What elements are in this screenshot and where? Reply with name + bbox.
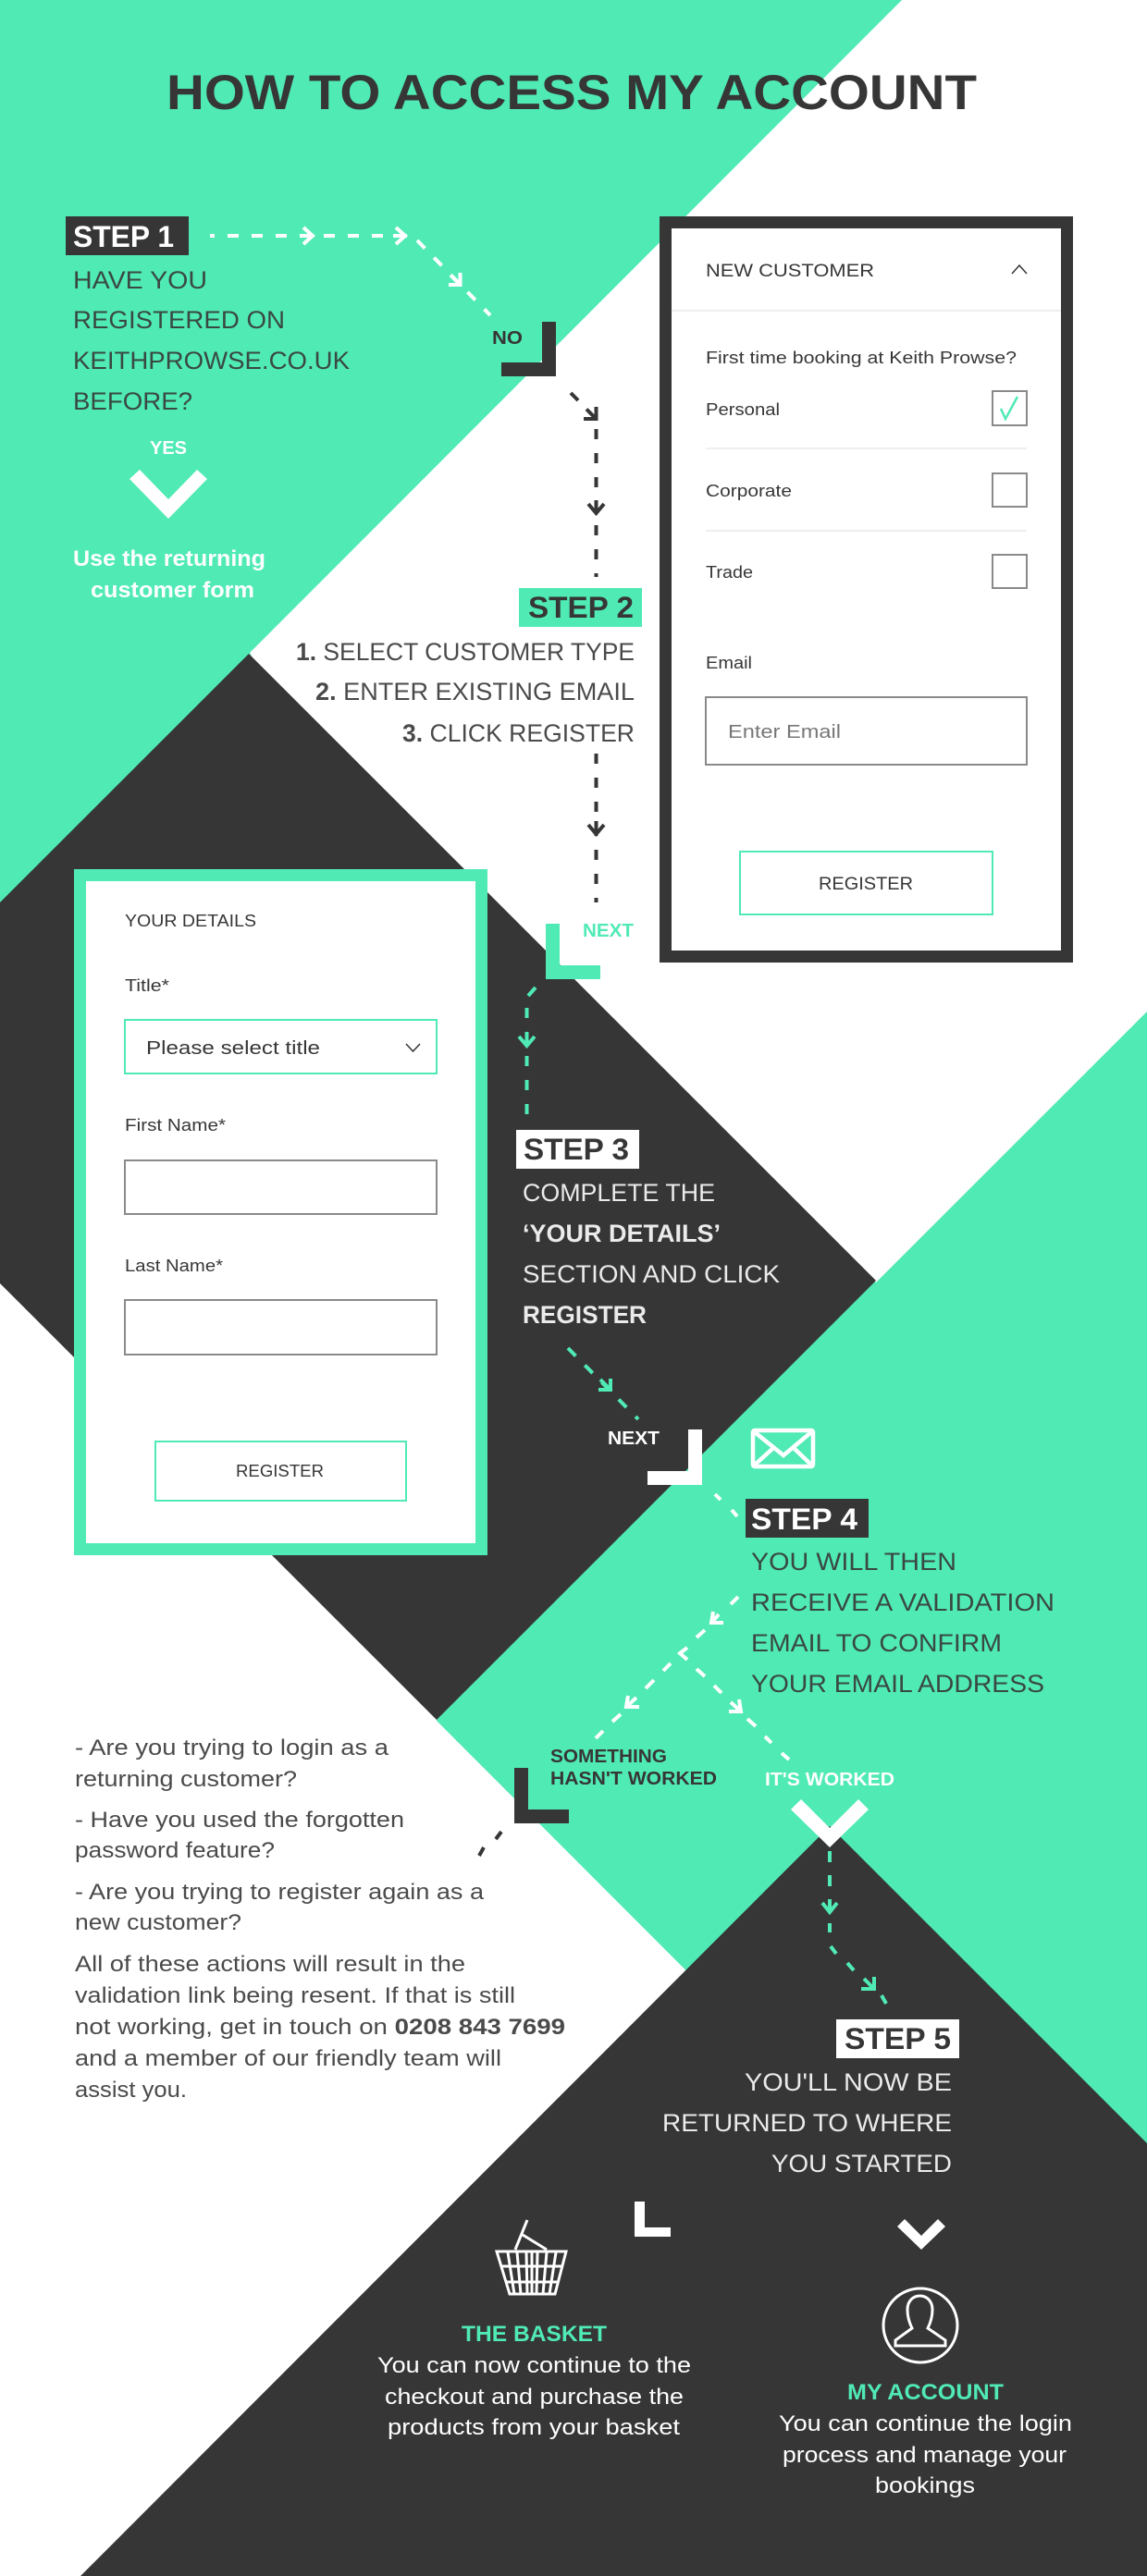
register button: REGISTER xyxy=(819,875,913,894)
panel: your details form xyxy=(74,869,487,1555)
icon: collapse chevron xyxy=(1012,265,1027,274)
option: corporate xyxy=(706,473,1027,507)
email field: Email xyxy=(706,654,752,672)
title field: Title* xyxy=(125,976,169,995)
step 1 block xyxy=(66,216,350,603)
something hasn't worked label and corner xyxy=(514,1747,717,1823)
account chevron arrow xyxy=(897,2219,945,2250)
my account text: process and manage your xyxy=(783,2443,1067,2468)
step 2 instructions: 3. CLICK REGISTER xyxy=(402,719,635,747)
step 3 instructions xyxy=(523,1179,780,1329)
background: bottom dark shape xyxy=(80,1826,1147,2576)
arrow: no to step 2 xyxy=(571,393,604,577)
step 4 block xyxy=(746,1499,1054,1698)
option: trade xyxy=(706,555,1027,588)
step 2 instructions: 2. ENTER EXISTING EMAIL xyxy=(315,678,635,705)
step 3 instructions: ‘YOUR DETAILS’ xyxy=(523,1220,721,1247)
troubleshooting text: All of these actions will result in the xyxy=(75,1952,465,1977)
register button: REGISTER xyxy=(236,1462,324,1480)
troubleshooting text: - Are you trying to login as a xyxy=(75,1736,389,1760)
email field xyxy=(706,654,1027,765)
step 5 block xyxy=(662,2019,959,2177)
returning customer note xyxy=(73,546,265,603)
arrow: next to step 4 xyxy=(715,1494,737,1516)
yes label: YES xyxy=(150,438,187,459)
the basket text xyxy=(377,2322,691,2440)
troubleshooting text: - Are you trying to register again as a xyxy=(75,1880,485,1905)
your details heading: YOUR DETAILS xyxy=(125,912,256,930)
last name field xyxy=(125,1257,437,1355)
the basket text: THE BASKET xyxy=(462,2322,607,2347)
step 5 text xyxy=(662,2068,952,2177)
first-time prompt: First time booking at Keith Prowse? xyxy=(706,349,1017,367)
troubleshooting text: and a member of our friendly team will xyxy=(75,2046,501,2071)
option: personal: Personal xyxy=(706,400,780,419)
my account text: You can continue the login xyxy=(779,2411,1072,2436)
troubleshooting text: not working, get in touch on 0208 843 7699 xyxy=(75,2015,565,2040)
step 4 text: YOUR EMAIL ADDRESS xyxy=(751,1670,1044,1698)
step 3 block xyxy=(516,1130,780,1329)
next corner (mint): NEXT xyxy=(583,921,634,941)
the basket text: You can now continue to the xyxy=(377,2353,691,2378)
register button xyxy=(740,852,993,914)
register button xyxy=(155,1441,406,1501)
basket corner arrow xyxy=(635,2202,671,2237)
the basket text: checkout and purchase the xyxy=(385,2385,684,2410)
step 2 instructions xyxy=(296,638,635,747)
yes chevron xyxy=(130,470,207,519)
troubleshooting text: password feature? xyxy=(75,1838,275,1863)
icon: envelope xyxy=(753,1430,813,1466)
icon: my account person xyxy=(883,2288,957,2362)
background: dark diamond xyxy=(0,654,876,1720)
panel: new customer form xyxy=(660,216,1073,963)
arrow: next to step 3 xyxy=(519,987,536,1115)
step 3 instructions: COMPLETE THE xyxy=(523,1179,715,1207)
my account text xyxy=(779,2380,1072,2498)
step 5 text: YOU STARTED xyxy=(771,2150,952,2177)
troubleshooting text: - Have you used the forgotten xyxy=(75,1808,404,1833)
next corner (mint) xyxy=(546,921,634,979)
option: personal xyxy=(706,391,1027,425)
next corner (white): NEXT xyxy=(608,1429,660,1449)
icon: basket xyxy=(497,2220,566,2294)
troubleshooting text xyxy=(75,1736,565,2103)
step 3 instructions: REGISTER xyxy=(523,1301,647,1329)
troubleshooting text: validation link being resent. If that is still xyxy=(75,1983,515,2008)
no label and corner: NO xyxy=(492,328,523,349)
arrow: step 4 branching xyxy=(596,1597,789,1760)
arrow: hasn't worked dashes xyxy=(479,1832,501,1856)
it's worked chevron xyxy=(791,1799,869,1847)
arrow: step 1 to no xyxy=(210,227,490,315)
option: trade: Trade xyxy=(706,563,753,582)
first name field: First Name* xyxy=(125,1116,226,1135)
next corner (white) xyxy=(608,1429,702,1485)
returning customer note: Use the returning xyxy=(73,546,265,571)
step 4 text: YOU WILL THEN xyxy=(751,1548,956,1576)
step 5 text: YOU'LL NOW BE xyxy=(745,2068,952,2096)
step 1 question: HAVE YOU xyxy=(73,266,207,294)
option: corporate: Corporate xyxy=(706,482,792,500)
no label and corner xyxy=(492,322,556,376)
my account text: bookings xyxy=(875,2473,975,2498)
step 4 text: RECEIVE A VALIDATION xyxy=(751,1589,1054,1616)
arrow: step 3 to next xyxy=(568,1348,638,1419)
step 5 text: RETURNED TO WHERE xyxy=(662,2109,952,2137)
troubleshooting text: returning customer? xyxy=(75,1767,297,1792)
step 4 text: EMAIL TO CONFIRM xyxy=(751,1629,1002,1657)
something hasn't worked label and corner: SOMETHING xyxy=(550,1747,667,1767)
step 5 badge: STEP 5 xyxy=(845,2022,951,2055)
new customer heading: NEW CUSTOMER xyxy=(706,262,874,281)
troubleshooting text: new customer? xyxy=(75,1910,241,1935)
troubleshooting text: assist you. xyxy=(75,2078,187,2103)
the basket text: products from your basket xyxy=(388,2415,680,2440)
step 3 badge: STEP 3 xyxy=(524,1133,629,1166)
step 1 question: BEFORE? xyxy=(73,387,192,415)
returning customer note: customer form xyxy=(91,578,254,603)
my account text: MY ACCOUNT xyxy=(847,2380,1004,2405)
background: right mint shape xyxy=(437,1012,1147,2210)
step 1 question: REGISTERED ON xyxy=(73,306,285,334)
step 1 question xyxy=(73,266,350,415)
step 2 badge: STEP 2 xyxy=(528,591,634,624)
step 2 block xyxy=(296,588,642,747)
email field: Enter Email xyxy=(728,722,841,742)
something hasn't worked label and corner: HASN'T WORKED xyxy=(550,1769,717,1789)
step 1 question: KEITHPROWSE.CO.UK xyxy=(73,347,350,374)
arrow: it's worked to step 5 xyxy=(822,1851,886,2004)
title field: Please select title xyxy=(146,1038,320,1059)
step 1 badge: STEP 1 xyxy=(73,220,174,253)
title: HOW TO ACCESS MY ACCOUNT xyxy=(166,66,977,120)
first name field xyxy=(125,1116,437,1214)
title field xyxy=(125,976,437,1073)
last name field: Last Name* xyxy=(125,1257,223,1275)
background: top mint triangle xyxy=(0,0,902,925)
step 2 instructions: 1. SELECT CUSTOMER TYPE xyxy=(296,638,635,666)
step 4 badge: STEP 4 xyxy=(751,1503,857,1536)
step 4 text xyxy=(751,1548,1054,1698)
arrow: step 2 to next xyxy=(588,754,604,902)
step 3 instructions: SECTION AND CLICK xyxy=(523,1260,780,1288)
it's worked label: IT'S WORKED xyxy=(765,1770,894,1790)
